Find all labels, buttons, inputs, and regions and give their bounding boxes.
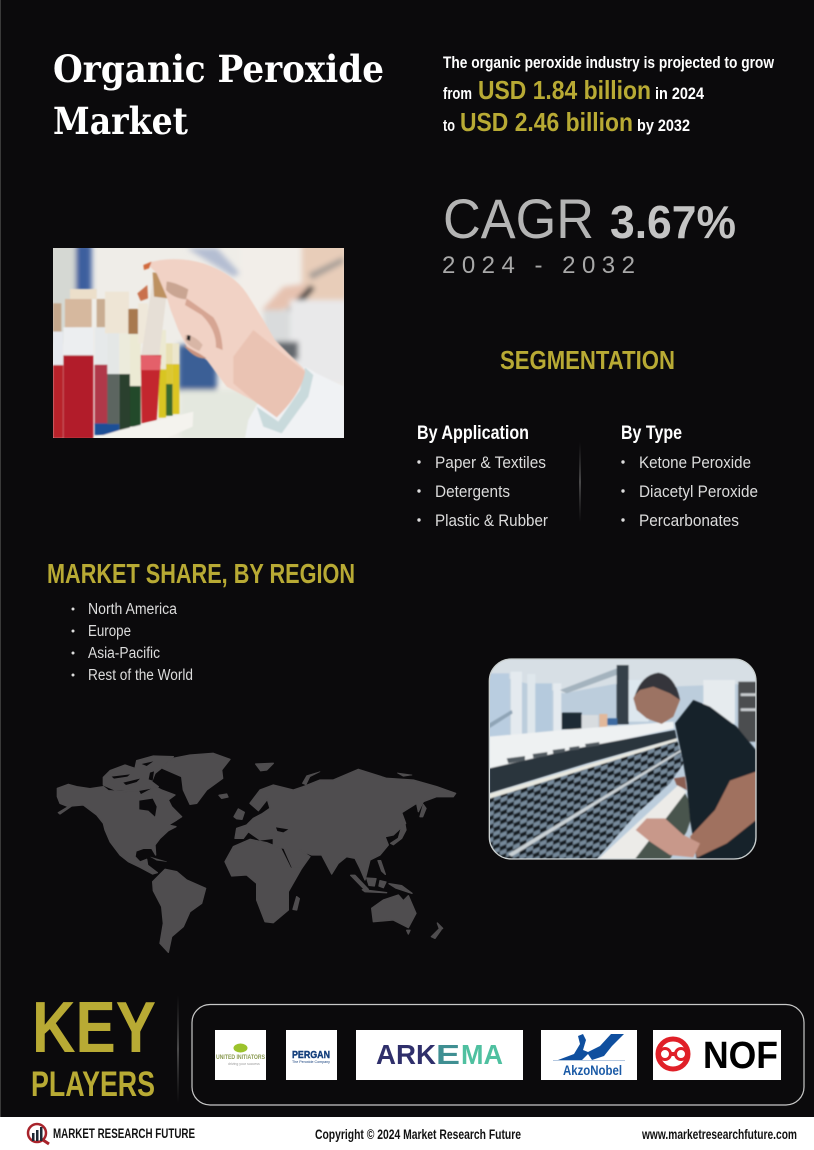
hand — [636, 818, 700, 857]
title — [53, 47, 384, 143]
market projection text: to — [443, 117, 455, 135]
hand — [149, 258, 305, 400]
market projection text: USD 2.46 billion — [460, 107, 633, 137]
footer — [0, 1117, 814, 1150]
held tube — [142, 284, 166, 356]
logo: Pergan: The Peroxide Company — [292, 1059, 330, 1064]
coat — [245, 367, 344, 438]
logo: NOF — [653, 1030, 781, 1080]
North America — [57, 784, 182, 874]
Cuba — [151, 857, 167, 862]
world map — [57, 753, 456, 952]
Eurasia — [235, 769, 456, 880]
CAGR figure: 3.67% — [610, 196, 736, 248]
market projection text: by 2032 — [637, 117, 690, 135]
Canadian arctic islands — [103, 756, 173, 791]
logo: Pergan: PERGAN — [292, 1049, 330, 1061]
British Isles — [234, 809, 244, 819]
logo: Pergan — [286, 1030, 337, 1080]
market projection text: from — [443, 85, 472, 103]
Black Sea — [276, 827, 288, 832]
rack — [93, 412, 193, 438]
logo: Arkema: MA — [461, 1039, 503, 1070]
photo: technician at loom — [489, 659, 756, 859]
logo: United Initiators — [215, 1030, 266, 1080]
footer: Copyright © 2024 Market Research Future — [315, 1127, 521, 1142]
list: by type: Ketone Peroxide — [639, 453, 751, 472]
Madagascar — [293, 897, 299, 910]
footer: MARKET RESEARCH FUTURE — [53, 1126, 195, 1141]
heading: key players: KEY — [32, 988, 156, 1068]
list: by application: Detergents — [435, 482, 510, 501]
logo: Arkema — [356, 1030, 523, 1080]
list: by type: Percarbonates — [639, 511, 739, 530]
list: by application: Paper & Textiles — [435, 453, 546, 472]
heading: key players — [31, 988, 156, 1104]
list: regions — [72, 601, 193, 684]
logo: Arkema: E — [436, 1039, 460, 1070]
Africa — [225, 839, 302, 923]
Australia — [372, 895, 416, 928]
heading: market share by region: MARKET SHARE, BY REGION — [47, 558, 355, 589]
CAGR figure — [442, 187, 736, 279]
list: regions: Asia-Pacific — [88, 645, 160, 662]
footer logo icon — [28, 1124, 49, 1144]
South America — [153, 869, 206, 952]
list: by type: By Type — [621, 423, 682, 444]
logo: United Initiators: UNITED INITIATORS — [216, 1054, 266, 1061]
New Zealand — [431, 923, 443, 938]
logo: United Initiators: driving your success — [228, 1062, 260, 1066]
heading: segmentation: SEGMENTATION — [500, 345, 675, 375]
front rail — [598, 785, 687, 859]
heading: key players: PLAYERS — [31, 1065, 155, 1104]
Indonesia — [351, 875, 412, 893]
list: regions: North America — [88, 601, 177, 618]
CAGR figure: 2024 - 2032 — [442, 252, 635, 279]
title: Organic Peroxide — [53, 47, 384, 91]
Iceland — [219, 794, 228, 798]
logo: NOF: NOF — [703, 1035, 778, 1077]
Novaya Zemlya — [302, 772, 320, 785]
machine top — [489, 722, 674, 768]
market projection text — [443, 54, 774, 137]
market projection text: in 2024 — [655, 85, 705, 103]
Philippines — [378, 861, 385, 874]
cloth — [489, 738, 683, 859]
list: by application — [417, 423, 548, 530]
panel: key player logos — [192, 1004, 804, 1105]
logo: AkzoNobel: AkzoNobel — [563, 1062, 622, 1078]
list: by type — [621, 423, 758, 530]
Greenland — [163, 753, 230, 804]
man torso — [675, 700, 756, 859]
market projection text: USD 1.84 billion — [478, 75, 651, 105]
list: by type: Diacetyl Peroxide — [639, 482, 758, 501]
tube row — [53, 303, 61, 332]
logo: Arkema: ARK — [376, 1039, 436, 1070]
Hudson Bay — [139, 799, 157, 817]
list: regions: Europe — [88, 623, 131, 640]
head — [633, 680, 680, 724]
list: regions: Rest of the World — [88, 667, 193, 684]
list: by application: By Application — [417, 423, 529, 444]
logo: AkzoNobel — [541, 1030, 637, 1080]
photo: lab test tubes — [50, 243, 347, 440]
arm — [690, 772, 756, 857]
Sakhalin and Japan — [420, 805, 426, 817]
CAGR figure: CAGR — [443, 187, 594, 250]
title: Market — [53, 99, 188, 143]
list: by application: Plastic & Rubber — [435, 511, 548, 530]
Svalbard — [256, 763, 273, 771]
